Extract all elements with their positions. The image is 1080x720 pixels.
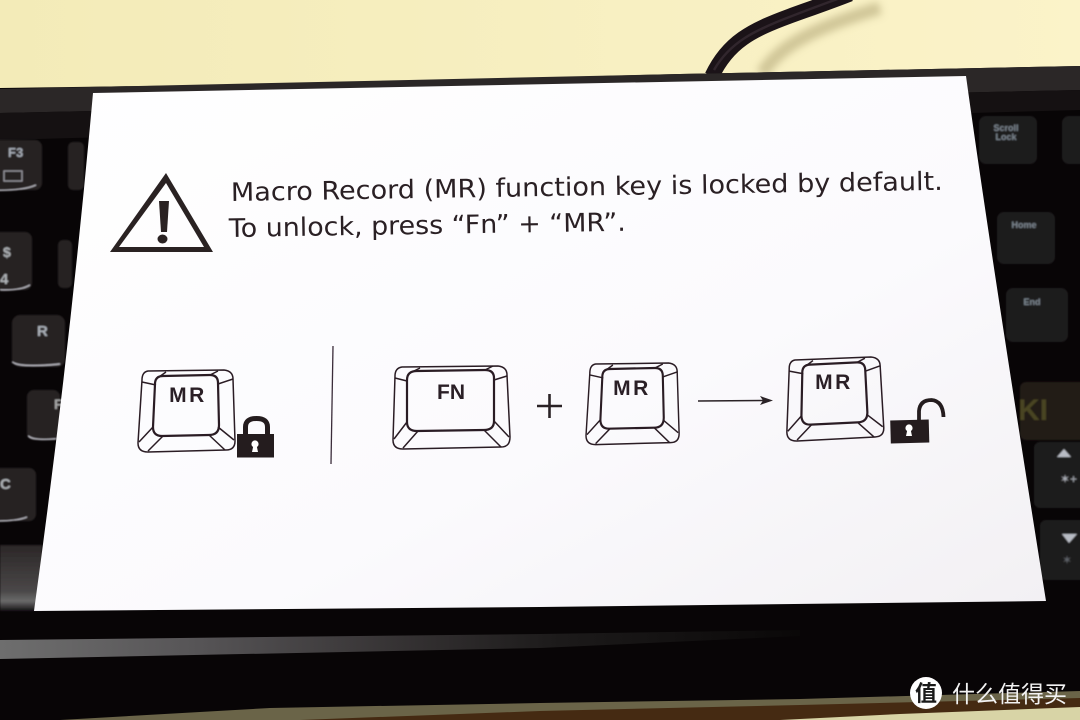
right keycaps: KI xyxy=(1018,394,1048,427)
left keycaps: F3 xyxy=(8,145,23,160)
watermark logo: 值 xyxy=(915,676,937,708)
panel: instruction card xyxy=(34,76,1046,611)
watermark logo: 什么值得买 xyxy=(952,675,1067,709)
right keycaps: Lock xyxy=(995,132,1017,142)
keyboard inner top shade xyxy=(0,90,1080,140)
icon: closed padlock xyxy=(237,418,274,458)
right keycaps: ✶ xyxy=(1062,553,1072,567)
keycap: MR locked xyxy=(138,370,235,452)
right keycaps: ✶+ xyxy=(1060,472,1077,486)
warning text: To unlock, press “Fn” + “MR”. xyxy=(228,208,626,244)
keycap: MR locked: MR xyxy=(169,384,207,407)
left keycaps xyxy=(0,140,84,611)
keyboard top bezel xyxy=(0,66,1080,113)
right keycaps: Home xyxy=(1011,220,1037,230)
left keycaps: R xyxy=(37,323,48,340)
left keycaps: 4 xyxy=(0,271,9,288)
divider line xyxy=(331,346,333,464)
keycap: FN xyxy=(393,366,510,449)
desk background xyxy=(0,0,1080,100)
warning text xyxy=(228,167,943,244)
left keycaps: F xyxy=(54,396,63,412)
warning text: Macro Record (MR) function key is locked by default. xyxy=(231,167,943,208)
right keycaps: End xyxy=(1024,297,1040,307)
arrow xyxy=(698,396,773,405)
left keycaps: C xyxy=(0,476,11,493)
icon: warning triangle xyxy=(110,173,213,252)
plus sign xyxy=(537,394,562,418)
right keycaps: Scroll xyxy=(993,123,1019,133)
keycap: MR xyxy=(586,363,679,445)
keycap: MR unlocked xyxy=(785,357,884,441)
keycap: MR unlocked: MR xyxy=(815,371,853,394)
keyboard lower bezel highlight band xyxy=(0,630,1080,720)
keycap: FN: FN xyxy=(437,381,465,404)
usb cable xyxy=(712,0,880,76)
left keycaps: $ xyxy=(3,244,11,260)
right keycaps xyxy=(979,116,1080,580)
icon: open padlock xyxy=(890,400,944,444)
keycap: MR: MR xyxy=(613,377,651,400)
